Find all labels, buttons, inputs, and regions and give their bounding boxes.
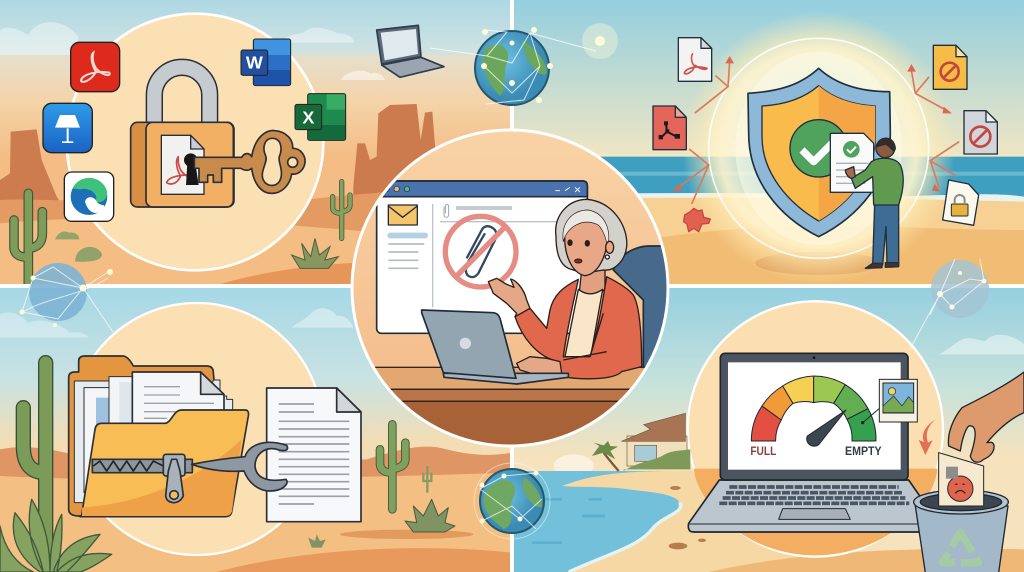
icon: Keynote app	[43, 103, 92, 153]
small cactus	[423, 466, 431, 493]
protective glowing bubble	[682, 12, 955, 285]
icon: wrench linking folder and document	[192, 442, 288, 491]
laptop with storage gauge	[688, 353, 939, 532]
plain document	[267, 388, 361, 522]
gauge	[751, 376, 876, 441]
shrubs	[624, 449, 690, 471]
red warning arrows	[677, 62, 959, 203]
agave plant	[405, 499, 455, 532]
tall cactus	[23, 363, 46, 549]
photo icon	[879, 379, 917, 422]
person holding approved document	[830, 133, 903, 268]
woman in red cardigan	[488, 199, 642, 379]
agave plant	[292, 238, 338, 268]
cactus	[333, 182, 350, 238]
floating document icons	[653, 38, 997, 232]
beach house	[621, 413, 687, 466]
icon: Excel app: X	[302, 108, 314, 128]
icon: padlock with pdf and key	[131, 67, 305, 207]
icon: Word app: W	[246, 53, 263, 73]
icon: blocked paperclip	[445, 216, 516, 287]
faded network globe: right	[910, 259, 989, 349]
icon: small laptop	[377, 25, 444, 77]
corrupt picture held in hand	[939, 453, 984, 506]
office chair	[613, 246, 674, 367]
icon: shield with check	[748, 68, 890, 237]
network globe: bottom centre	[474, 463, 550, 539]
cactus	[14, 193, 42, 287]
red down arrow	[919, 419, 936, 455]
icon: Acrobat app	[71, 42, 120, 92]
icon: Edge app	[64, 172, 114, 221]
stones	[669, 486, 706, 549]
central panel: user confused by missing attachment	[350, 130, 674, 448]
email window	[377, 181, 587, 333]
panel: freeing disk space on a coastal laptop	[512, 286, 1024, 572]
recycling bin	[914, 490, 1008, 572]
agave plant	[0, 499, 112, 572]
faded network globe: left	[20, 263, 113, 332]
zipped folder with documents	[69, 356, 249, 517]
small plant	[308, 534, 326, 548]
icon: Word app	[241, 39, 291, 86]
desk	[350, 367, 674, 448]
palm tree	[592, 441, 619, 471]
circle backdrop	[67, 14, 323, 270]
hand	[948, 372, 1024, 462]
label: full: FULL	[750, 444, 776, 458]
network globe: top centre	[430, 23, 618, 105]
panel: protected documents on the beach	[512, 0, 1024, 286]
panel: compressed folder in the desert	[0, 286, 512, 572]
panel: unlocking files in the desert	[0, 0, 512, 287]
circle backdrop	[688, 301, 943, 557]
circle backdrop	[93, 302, 316, 556]
icon: Excel app	[295, 94, 346, 140]
label: empty: EMPTY	[845, 444, 882, 458]
laptop	[422, 310, 568, 384]
cactus	[380, 424, 405, 509]
laptop logo	[460, 338, 471, 349]
